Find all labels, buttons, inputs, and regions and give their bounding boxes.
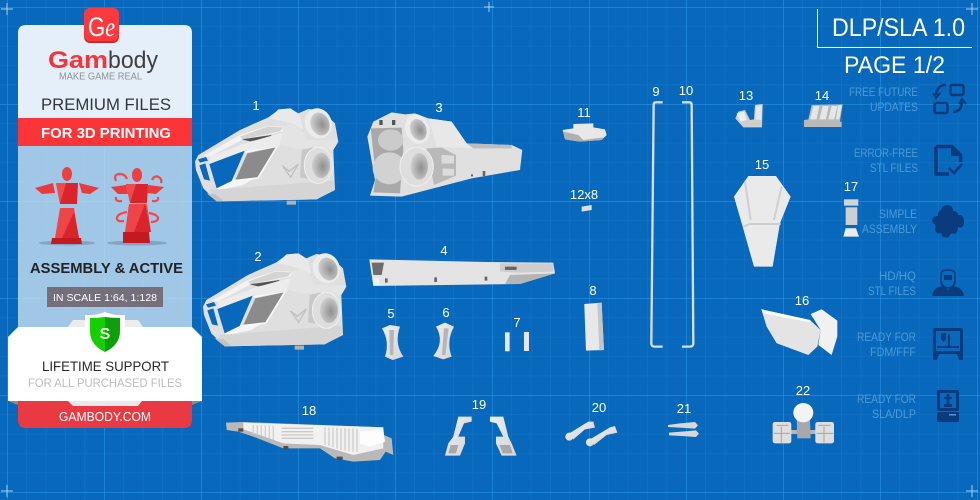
part numbers: 1 <box>252 98 260 113</box>
white support card <box>8 312 202 401</box>
feature: hd/hq stl files: STL FILES <box>868 286 916 298</box>
feature: free future updates <box>849 85 966 114</box>
support subtext: FOR ALL PURCHASED FILES <box>28 376 182 390</box>
panel lower light blue area <box>18 146 192 332</box>
part 7 <box>505 332 529 351</box>
heading premium files: PREMIUM FILES <box>41 95 171 114</box>
tagline: MAKE GAME REAL <box>59 72 142 82</box>
part numbers: 16 <box>795 293 809 308</box>
part numbers: 12x8 <box>570 187 598 202</box>
feature: free future updates: UPDATES <box>870 102 918 114</box>
icon: fdm printer <box>933 328 963 360</box>
feature: ready for sla/dlp <box>857 390 959 422</box>
part 8 <box>584 303 604 351</box>
part numbers: 10 <box>679 83 693 98</box>
icon: sla printer <box>937 390 959 422</box>
icon: bust portrait <box>932 270 964 296</box>
part 9 <box>651 102 663 347</box>
part 2 <box>203 249 346 350</box>
part 16 <box>761 309 837 355</box>
part 18 <box>226 422 393 462</box>
part numbers: 20 <box>592 400 606 415</box>
feature: simple assembly <box>862 205 964 238</box>
part 21 <box>668 422 699 437</box>
part 13 <box>735 104 763 127</box>
part numbers: 5 <box>387 306 395 321</box>
feature: ready for sla/dlp: SLA/DLP <box>872 409 916 421</box>
scale badge <box>47 287 163 307</box>
heading assembly and active: ASSEMBLY & ACTIVE <box>30 261 183 277</box>
part 12 <box>582 205 592 212</box>
part 10 <box>682 102 693 347</box>
part 17 <box>843 199 859 237</box>
logo icon: Ge <box>88 12 115 42</box>
part numbers: 18 <box>302 403 316 418</box>
part numbers: 15 <box>755 157 769 172</box>
part 3 <box>367 111 522 197</box>
red banner <box>18 118 192 146</box>
feature: hd/hq stl files: HD/HQ <box>879 271 916 283</box>
support heading: LIFETIME SUPPORT <box>42 358 169 374</box>
part numbers: 14 <box>815 88 829 103</box>
part numbers: 21 <box>677 401 691 416</box>
icon: update arrows <box>933 85 966 113</box>
title box <box>818 9 972 48</box>
bottom red website bar <box>8 401 202 428</box>
feature: simple assembly: ASSEMBLY <box>862 224 917 236</box>
icon: green shield <box>85 312 125 354</box>
feature: ready for sla/dlp: READY FOR <box>857 394 916 406</box>
part 19 <box>445 417 517 456</box>
brand name <box>48 47 158 74</box>
feature: hd/hq stl files <box>868 270 964 298</box>
parts 9 to 16 <box>563 102 843 355</box>
part 4 <box>369 259 555 286</box>
scale badge: IN SCALE 1:64, 1:128 <box>53 292 157 304</box>
feature: error-free stl files: STL FILES <box>870 163 918 175</box>
part numbers: 8 <box>589 283 597 298</box>
part numbers: 3 <box>435 100 443 115</box>
brand name: Gam <box>48 47 108 74</box>
feature: simple assembly: SIMPLE <box>879 209 917 221</box>
part 1 <box>195 104 338 205</box>
feature: ready for fdm/fff: READY FOR <box>857 332 916 344</box>
page number: PAGE 1/2 <box>844 52 945 79</box>
icon: puzzle piece <box>932 205 964 238</box>
part 11 <box>563 123 607 142</box>
feature: free future updates: FREE FUTURE <box>849 87 918 99</box>
feature: ready for fdm/fff: FDM/FFF <box>870 347 916 359</box>
part 6 <box>433 323 454 359</box>
part numbers: 13 <box>739 88 753 103</box>
parts 5 to 8, 19 and 20 <box>382 303 617 456</box>
part 22 <box>773 403 834 443</box>
red banner: FOR 3D PRINTING <box>41 125 171 142</box>
feature: error-free stl files: ERROR-FREE <box>854 148 918 160</box>
icon: articulated figure with arrows <box>107 168 167 246</box>
part numbers: 11 <box>577 105 591 120</box>
part 15 <box>734 176 791 267</box>
feature: ready for fdm/fff <box>857 328 963 360</box>
part 20 <box>565 422 617 446</box>
bottom red website bar: GAMBODY.COM <box>59 409 151 424</box>
part numbers: 9 <box>652 84 660 99</box>
title: DLP/SLA 1.0 <box>832 14 965 42</box>
part numbers: 6 <box>442 305 450 320</box>
part numbers: 7 <box>513 315 521 330</box>
left brand panel <box>8 8 202 428</box>
brand name: body <box>108 47 158 74</box>
part numbers: 4 <box>440 243 448 258</box>
icon: assembled figure <box>35 167 99 246</box>
icon: green shield: S <box>100 326 111 343</box>
part numbers: 22 <box>796 383 810 398</box>
part numbers: 17 <box>844 179 858 194</box>
feature: error-free stl files <box>854 146 962 175</box>
part numbers <box>252 83 858 418</box>
panel upper area <box>18 25 192 118</box>
icon: checked document <box>936 146 962 174</box>
part numbers: 2 <box>254 249 262 264</box>
part 5 <box>382 325 403 360</box>
part numbers: 19 <box>472 397 486 412</box>
part 14 <box>804 104 843 127</box>
